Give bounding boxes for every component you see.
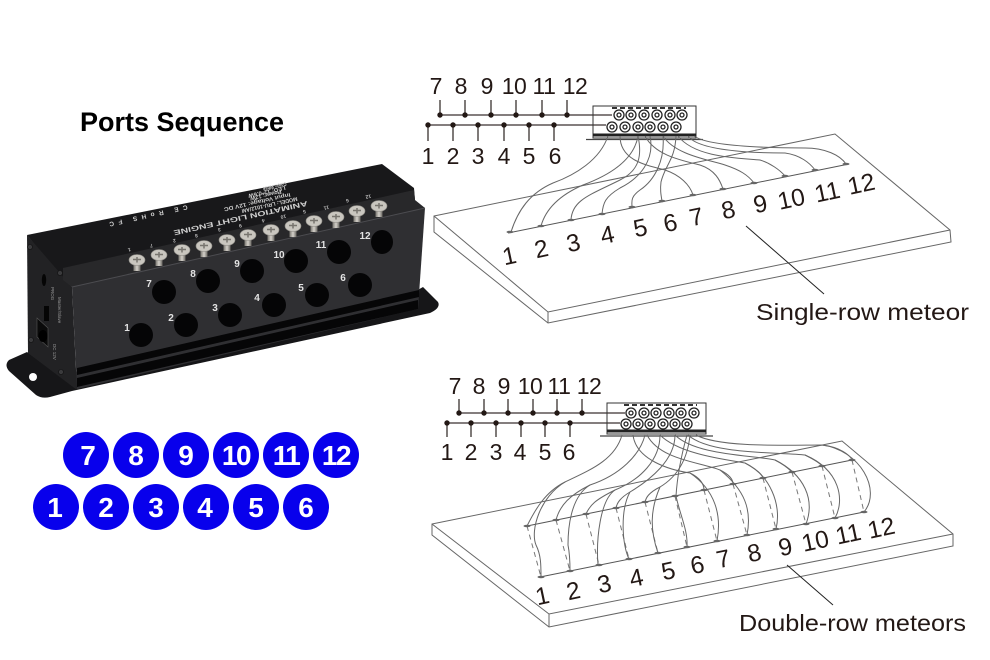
rail numbers: 6: [661, 209, 680, 238]
rail numbers: 5: [631, 214, 650, 243]
label text on top face: Color: White: [262, 180, 287, 191]
mounting flange: [6, 287, 439, 398]
label text on top face: ANIMATION LIGHT ENGINE: [172, 199, 308, 236]
rail numbers: 12: [865, 513, 898, 545]
port numbers on the box: 10: [273, 250, 285, 261]
port sequence badges: [33, 432, 359, 530]
rail numbers: 3: [564, 229, 583, 258]
lower labels: 3: [472, 143, 484, 169]
rail numbers: [500, 169, 878, 271]
lower labels: [422, 143, 561, 169]
lower labels: 6: [563, 439, 575, 465]
upper labels: 10: [518, 373, 542, 399]
badge numbers: 12: [322, 440, 351, 471]
upper labels: [430, 73, 587, 99]
label text on top face: CE RoHS FC: [108, 203, 188, 227]
rail numbers: 10: [775, 184, 808, 216]
product photo: controller box: [6, 164, 439, 398]
upper labels: [449, 373, 601, 399]
label text on top face: Input Voltage: 12V DC: [223, 191, 291, 212]
callout text: Single-row meteor: [756, 299, 969, 325]
port numbers on the box: [124, 231, 371, 334]
badge numbers: 7: [80, 440, 96, 471]
badges: lower row 1 to 6: [33, 484, 329, 530]
rail numbers: 5: [659, 557, 678, 586]
board: [434, 134, 951, 323]
port numbers on the box: 11: [316, 240, 327, 251]
rail numbers: 3: [595, 570, 614, 599]
label text on top face: LED: 12*0.6W: [247, 184, 286, 198]
upper labels: 12: [563, 73, 587, 99]
title: Ports Sequence: [80, 107, 284, 137]
badge numbers: [47, 440, 351, 523]
upper labels: 12: [577, 373, 601, 399]
lower labels: 1: [441, 439, 453, 465]
upper ledge band: [63, 190, 425, 287]
bus nodes: [444, 410, 585, 426]
small terminal numbers: 5: [302, 208, 306, 214]
small terminal numbers: 4: [261, 217, 265, 223]
board: [432, 441, 953, 627]
badge numbers: 1: [47, 492, 63, 523]
lower labels: 1: [422, 143, 434, 169]
badge numbers: 4: [197, 492, 213, 523]
rail numbers: 2: [564, 577, 583, 606]
port numbers on the box: 3: [212, 303, 218, 314]
lower labels: [441, 439, 575, 465]
dashed links between rails: [527, 460, 864, 577]
rail numbers: 1: [533, 582, 552, 611]
port holes: [129, 230, 393, 347]
port numbers on the box: 1: [124, 323, 130, 334]
rail numbers: 6: [688, 551, 707, 580]
upper labels: 7: [449, 373, 461, 399]
lower labels: 5: [523, 143, 535, 169]
callout leader: [746, 226, 824, 294]
label text on top face: [108, 180, 308, 236]
left side face: [27, 235, 77, 390]
small terminal numbers: 6: [345, 197, 349, 203]
left side controls: [42, 274, 46, 286]
terminal screws: [129, 200, 387, 271]
LED pads: [524, 459, 868, 578]
small terminal numbers: 1: [127, 246, 131, 252]
rail numbers: 2: [532, 235, 551, 264]
small terminal numbers: 2: [172, 237, 176, 243]
port numbers on the box: 8: [190, 269, 196, 280]
port numbers on the box: 5: [298, 283, 304, 294]
small terminal numbers: 12: [365, 192, 372, 200]
upper labels: 9: [481, 73, 493, 99]
rail numbers: 8: [745, 539, 764, 568]
lower labels: 4: [514, 439, 527, 465]
LED pads: [506, 163, 850, 233]
wires: [527, 435, 870, 577]
rail numbers: 7: [714, 545, 733, 574]
upper labels: 11: [548, 373, 570, 399]
rail numbers: 11: [833, 519, 864, 551]
rail numbers: 1: [500, 242, 519, 271]
rail numbers: 8: [719, 196, 738, 225]
lower labels: 4: [498, 143, 511, 169]
badge numbers: 3: [148, 492, 164, 523]
small terminal numbers: 10: [280, 212, 287, 220]
lower labels: 6: [549, 143, 561, 169]
label text on top face: Power: 12W: [249, 188, 282, 201]
rail numbers: 12: [845, 169, 878, 201]
port numbers on the box: 6: [340, 273, 346, 284]
label text on top face: MODEL: LRU-1012/AM: [241, 195, 298, 213]
diagram: single-row meteor: [422, 73, 969, 325]
badge numbers: 5: [248, 492, 264, 523]
rail numbers: 9: [776, 533, 795, 562]
rail numbers: 10: [799, 526, 832, 558]
small terminal numbers: 3: [217, 226, 221, 232]
corner screws: [28, 244, 64, 374]
controller outline: [600, 403, 713, 436]
port numbers on the box: 4: [254, 293, 260, 304]
upper labels: 7: [430, 73, 442, 99]
small terminal numbers: [127, 192, 372, 252]
rail numbers: 7: [687, 203, 706, 232]
upper labels: 8: [455, 73, 467, 99]
diagram: double-row meteors: [432, 373, 966, 636]
rail numbers: 9: [751, 190, 770, 219]
side panel text: [50, 287, 62, 360]
top face: [27, 164, 415, 280]
upper labels: 9: [498, 373, 510, 399]
small terminal numbers: 11: [323, 203, 329, 211]
bus nodes: [425, 112, 570, 128]
rail numbers: 11: [812, 177, 843, 209]
side panel text: PROG: [50, 287, 55, 301]
badge numbers: 11: [273, 440, 300, 471]
rail numbers: [533, 513, 898, 611]
side panel text: Master/Slave: [57, 297, 62, 324]
upper labels: 10: [502, 73, 526, 99]
badge numbers: 8: [128, 440, 144, 471]
badge numbers: 9: [178, 440, 194, 471]
small terminal numbers: 9: [238, 222, 242, 228]
port numbers on the box: 7: [146, 279, 152, 290]
lower labels: 2: [447, 143, 459, 169]
callout text: Double-row meteors: [739, 610, 966, 636]
side panel text: DC 12V: [52, 344, 57, 360]
badge numbers: 10: [222, 440, 251, 471]
port wiring bus: [447, 399, 625, 437]
front face: [72, 208, 425, 389]
port numbers on the box: 2: [168, 313, 174, 324]
port wiring bus: [428, 100, 612, 141]
rail numbers: 4: [598, 221, 617, 250]
port numbers on the box: 12: [359, 231, 371, 242]
small terminal numbers: 8: [194, 232, 198, 238]
upper labels: 11: [533, 73, 555, 99]
badge numbers: 2: [98, 492, 114, 523]
LED rail: [508, 164, 849, 233]
callout leader: [787, 565, 833, 605]
rail grooves: [77, 290, 419, 375]
controller outline: [586, 106, 703, 140]
lower labels: 2: [465, 439, 477, 465]
port numbers on the box: 9: [234, 259, 240, 270]
LED rails: [527, 460, 864, 577]
badge numbers: 6: [298, 492, 314, 523]
small terminal numbers: 7: [149, 242, 153, 248]
lower labels: 5: [539, 439, 551, 465]
rail numbers: 4: [627, 564, 646, 593]
upper labels: 8: [473, 373, 485, 399]
lower labels: 3: [490, 439, 502, 465]
wires: [511, 136, 846, 232]
badges: upper row 7 to 12: [63, 432, 359, 478]
